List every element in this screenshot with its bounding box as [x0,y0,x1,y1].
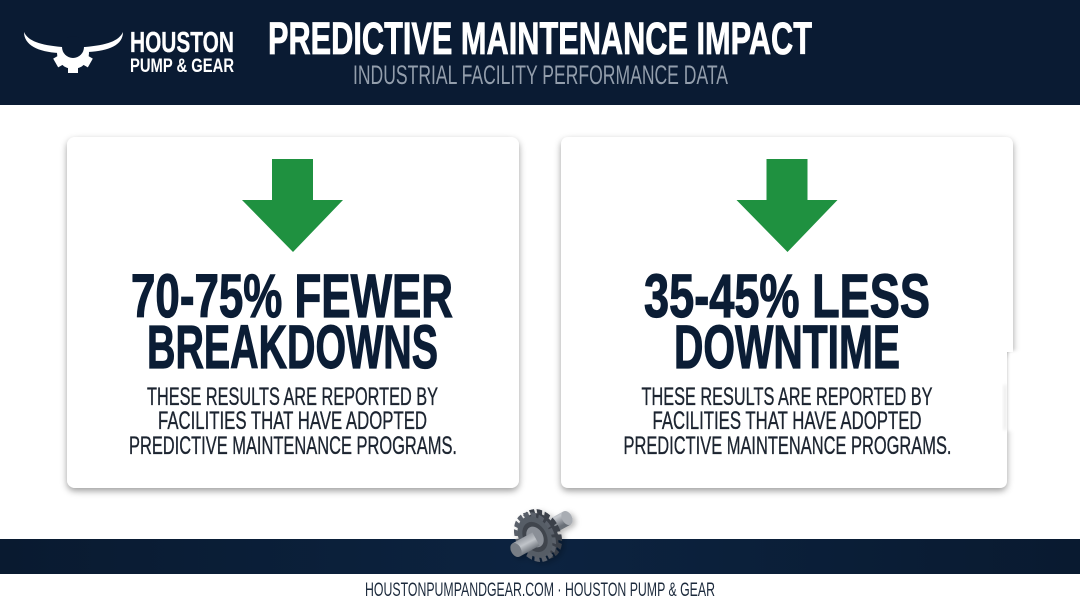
heading [131,262,453,381]
footer band [0,539,1080,574]
supporting text: FACILITIES THAT HAVE ADOPTED [652,407,922,435]
heading: 35-45% LESS [644,262,930,330]
panel: less downtime [561,137,1022,488]
supporting text: FACILITIES THAT HAVE ADOPTED [158,407,427,435]
header band [0,0,1080,105]
subtitle: INDUSTRIAL FACILITY PERFORMANCE DATA [353,60,728,90]
heading [644,262,930,381]
icon: longhorn and gear [24,28,123,73]
icon: green down arrow [242,159,343,252]
title: PREDICTIVE MAINTENANCE IMPACT [268,13,812,64]
heading: DOWNTIME [674,313,900,381]
supporting text [129,383,457,460]
supporting text: THESE RESULTS ARE REPORTED BY [642,383,933,411]
icon: gear on shaft [508,505,575,566]
logo wordmark line 1: HOUSTON [130,27,234,59]
supporting text: PREDICTIVE MAINTENANCE PROGRAMS. [129,432,457,460]
card background [561,137,1022,488]
logo wordmark line 2: PUMP & GEAR [130,56,234,77]
footer text: HOUSTONPUMPANDGEAR.COM · HOUSTON PUMP & GEAR [365,580,715,601]
icon: green down arrow [736,159,838,252]
heading: 70-75% FEWER [131,262,453,330]
panel: fewer breakdowns [67,137,519,488]
logo: Houston Pump & Gear [24,27,234,77]
supporting text: THESE RESULTS ARE REPORTED BY [147,383,438,411]
heading: BREAKDOWNS [147,313,438,381]
card background [67,137,519,488]
supporting text [624,383,952,460]
